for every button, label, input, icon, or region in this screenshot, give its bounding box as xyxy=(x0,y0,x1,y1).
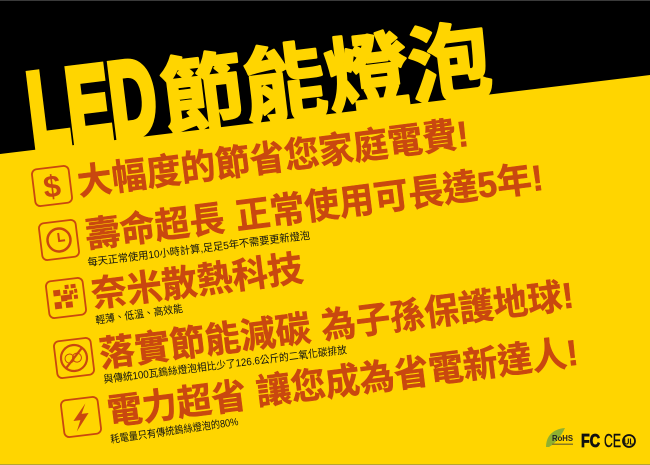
icon: clock xyxy=(38,219,80,261)
icon: no CO2 xyxy=(53,337,95,379)
benefit 1 heading: 大幅度的節省您家庭電費! xyxy=(75,113,471,203)
title: LED: LED xyxy=(21,36,163,171)
benefit 5 heading: 讓您成為省電新達人! xyxy=(254,332,580,413)
icon: CE mark: CE xyxy=(604,431,621,451)
benefit 2 heading: 壽命超長 xyxy=(83,197,227,256)
benefit 5 heading xyxy=(105,332,580,433)
icon: dollar: $ xyxy=(41,168,63,205)
icon: FC mark: FC xyxy=(581,431,600,451)
certification logos xyxy=(546,428,635,451)
benefit 4 heading: 落實節能減碳 xyxy=(97,308,313,375)
benefit 4 note: 與傳統100瓦鎢絲燈泡相比少了126.6公斤的二氧化碳排放 xyxy=(103,343,348,386)
icon: lightning bolt xyxy=(60,396,102,438)
icon: dollar xyxy=(31,165,73,207)
title xyxy=(21,13,497,171)
benefit 3 heading: 奈米散熱科技 xyxy=(89,248,305,315)
benefit 5 note: 耗電量只有傳統鎢絲燈泡的80% xyxy=(110,415,239,446)
icon: RoHS leaf: RoHS xyxy=(552,434,574,443)
benefit 2 heading: 正常使用可長達5年! xyxy=(233,157,546,237)
icon: UL mark: UL xyxy=(624,438,634,446)
icon: checker pattern xyxy=(45,277,87,319)
black header band xyxy=(0,0,650,154)
benefit 2 note: 每天正常使用10小時計算,足足5年不需要更新燈泡 xyxy=(87,229,311,269)
benefit 4 heading xyxy=(97,274,576,375)
title: 節能燈泡: 節能燈泡 xyxy=(156,13,497,147)
benefit 2 heading xyxy=(83,157,546,256)
benefit 3 note: 輕薄、低溫、高效能 xyxy=(95,302,184,327)
benefit 4 heading: 為子孫保護地球! xyxy=(319,274,576,347)
benefit 5 heading: 電力超省 xyxy=(105,375,249,433)
